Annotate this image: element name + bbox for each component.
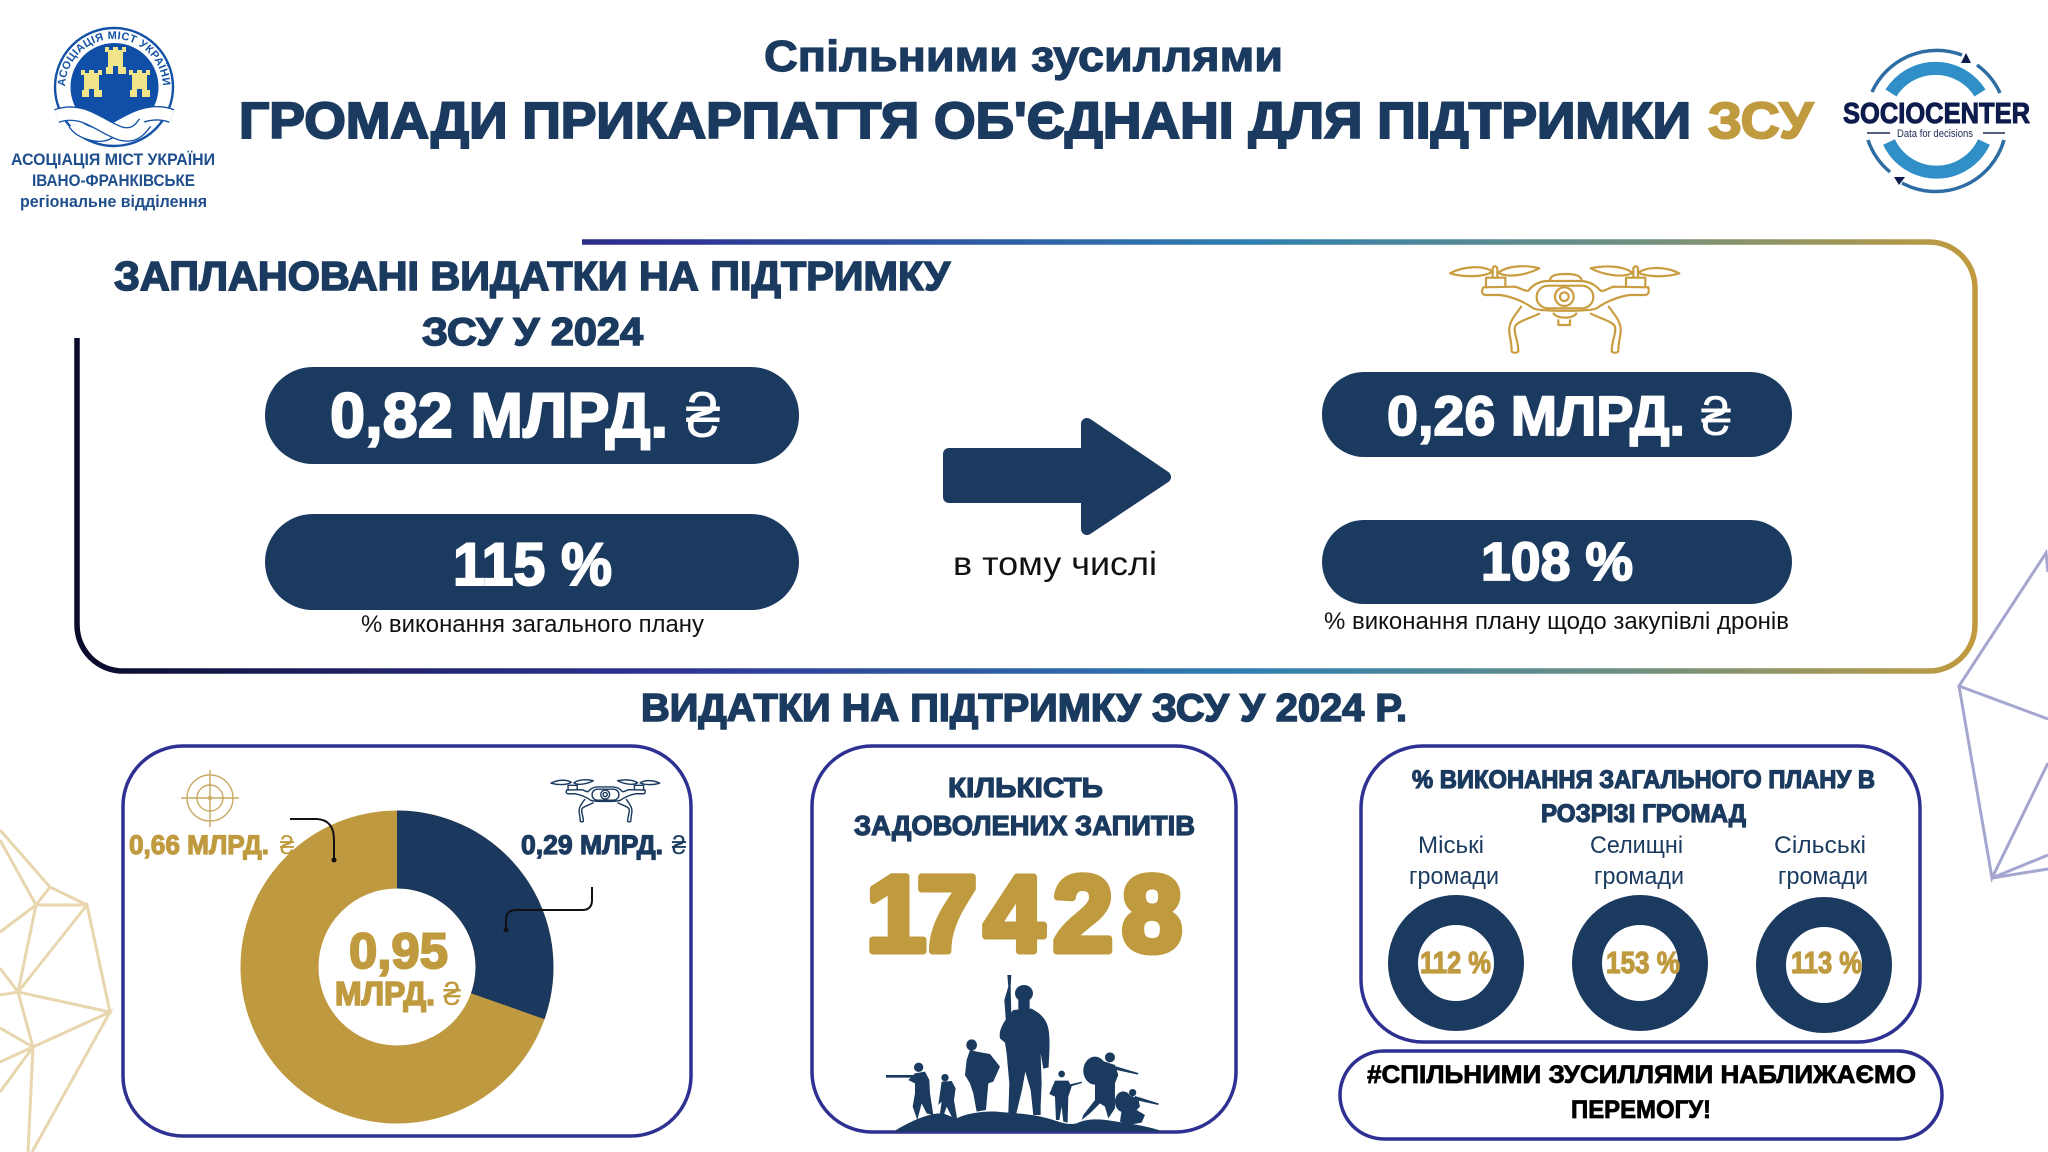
heading: satisfied requests <box>854 772 1195 841</box>
label: drones spending: ₴ <box>672 830 687 860</box>
heading: satisfied requests: ЗАДОВОЛЕНИХ ЗАПИТІВ <box>854 810 1195 841</box>
callout: hashtag: ПЕРЕМОГУ! <box>1571 1096 1711 1124</box>
title: ГРОМАДИ ПРИКАРПАТТЯ ОБ'ЄДНАНІ ДЛЯ ПІДТРИМКИ <box>239 92 1691 149</box>
logo: association of Ukrainian cities: АСОЦІАЦІЯ МІСТ УКРАЇНИ <box>11 151 215 169</box>
panel: donut chart card <box>123 746 691 1136</box>
pill: drone plan percent: 108 % <box>1481 532 1633 592</box>
pill: total amount: ₴ <box>686 382 721 451</box>
logo: sociocenter: Data for decisions <box>1897 128 1973 140</box>
pill: total plan percent <box>265 514 799 610</box>
pill: total plan percent: 115 % <box>453 531 612 598</box>
heading: planned spending <box>114 253 950 354</box>
pill: drone amount: ₴ <box>1701 387 1731 447</box>
caption: total plan: % виконання загального плану <box>361 611 704 638</box>
leader line: other spending <box>290 819 336 862</box>
heading: spending 2024: ВИДАТКИ НА ПІДТРИМКУ ЗСУ У 2024 Р. <box>641 687 1407 730</box>
column: settlement communities: Селищні <box>1590 832 1683 859</box>
logo: association of Ukrainian cities <box>11 26 215 211</box>
callout: hashtag: #СПІЛЬНИМИ ЗУСИЛЛЯМИ НАБЛИЖАЄМО <box>1367 1061 1916 1089</box>
panel: planned spending <box>77 242 1975 671</box>
title: Спільними зусиллями <box>764 32 1283 81</box>
donut total: МЛРД. <box>335 975 435 1012</box>
donut total: ₴ <box>443 976 461 1012</box>
column: urban communities <box>1403 832 1509 1016</box>
heading: satisfied requests: КІЛЬКІСТЬ <box>948 772 1103 803</box>
column: rural communities: Сільські <box>1774 832 1866 859</box>
column: urban communities: 112 % <box>1420 945 1491 980</box>
pill: drone plan percent <box>1322 520 1792 604</box>
column: settlement communities: громади <box>1594 863 1684 890</box>
heading: plan execution: РОЗРІЗІ ГРОМАД <box>1541 800 1746 828</box>
caption: drone plan: % виконання плану щодо закупівлі дронів <box>1324 608 1789 635</box>
pill: drone amount: 0,26 МЛРД. <box>1387 384 1685 447</box>
title: ЗСУ <box>1708 92 1814 149</box>
icon: target <box>181 770 239 827</box>
column: settlement communities <box>1587 832 1693 1016</box>
panel: satisfied requests <box>812 746 1236 1132</box>
column: rural communities: 113 % <box>1791 945 1862 980</box>
number: 17428: 17428 <box>866 853 1182 974</box>
donut chart <box>280 810 553 1084</box>
icon: gold drone <box>1450 266 1679 353</box>
column: urban communities: Міські <box>1418 832 1484 859</box>
pill: drone amount <box>1322 372 1792 457</box>
leader line: drones spending <box>504 887 592 932</box>
pill: total amount <box>265 367 799 464</box>
donut total <box>335 923 461 1012</box>
logo: association of Ukrainian cities: регіональне відділення <box>20 193 207 211</box>
title <box>239 32 1814 149</box>
text: including: в тому числі <box>953 545 1157 582</box>
column: settlement communities: 153 % <box>1606 945 1680 980</box>
icon: soldiers silhouette <box>886 975 1163 1132</box>
heading: plan execution <box>1412 766 1875 828</box>
label: other spending: 0,66 МЛРД. <box>129 830 269 860</box>
icon: navy drone <box>551 780 660 822</box>
logo: association of Ukrainian cities: ІВАНО-ФРАНКІВСЬКЕ <box>32 172 195 190</box>
callout: hashtag <box>1340 1051 1942 1139</box>
logo: sociocenter <box>1843 50 2030 192</box>
pill: total amount: 0,82 МЛРД. <box>330 381 668 451</box>
label: other spending: ₴ <box>280 830 295 860</box>
heading: plan execution: % ВИКОНАННЯ ЗАГАЛЬНОГО ПЛАНУ В <box>1412 766 1875 794</box>
heading: planned spending: ЗАПЛАНОВАНІ ВИДАТКИ НА ПІДТРИМКУ <box>114 253 950 299</box>
heading: planned spending: ЗСУ У 2024 <box>422 311 643 354</box>
donut total: 0,95 <box>349 923 448 979</box>
label: drones spending: 0,29 МЛРД. <box>521 830 663 860</box>
logo: association of Ukrainian cities: АСОЦІАЦІЯ МІСТ УКРАЇНИ <box>58 31 170 86</box>
column: urban communities: громади <box>1409 863 1499 890</box>
column: rural communities <box>1771 832 1877 1018</box>
panel: plan execution by community <box>1361 746 1920 1042</box>
arrow <box>949 424 1165 529</box>
column: rural communities: громади <box>1778 863 1868 890</box>
